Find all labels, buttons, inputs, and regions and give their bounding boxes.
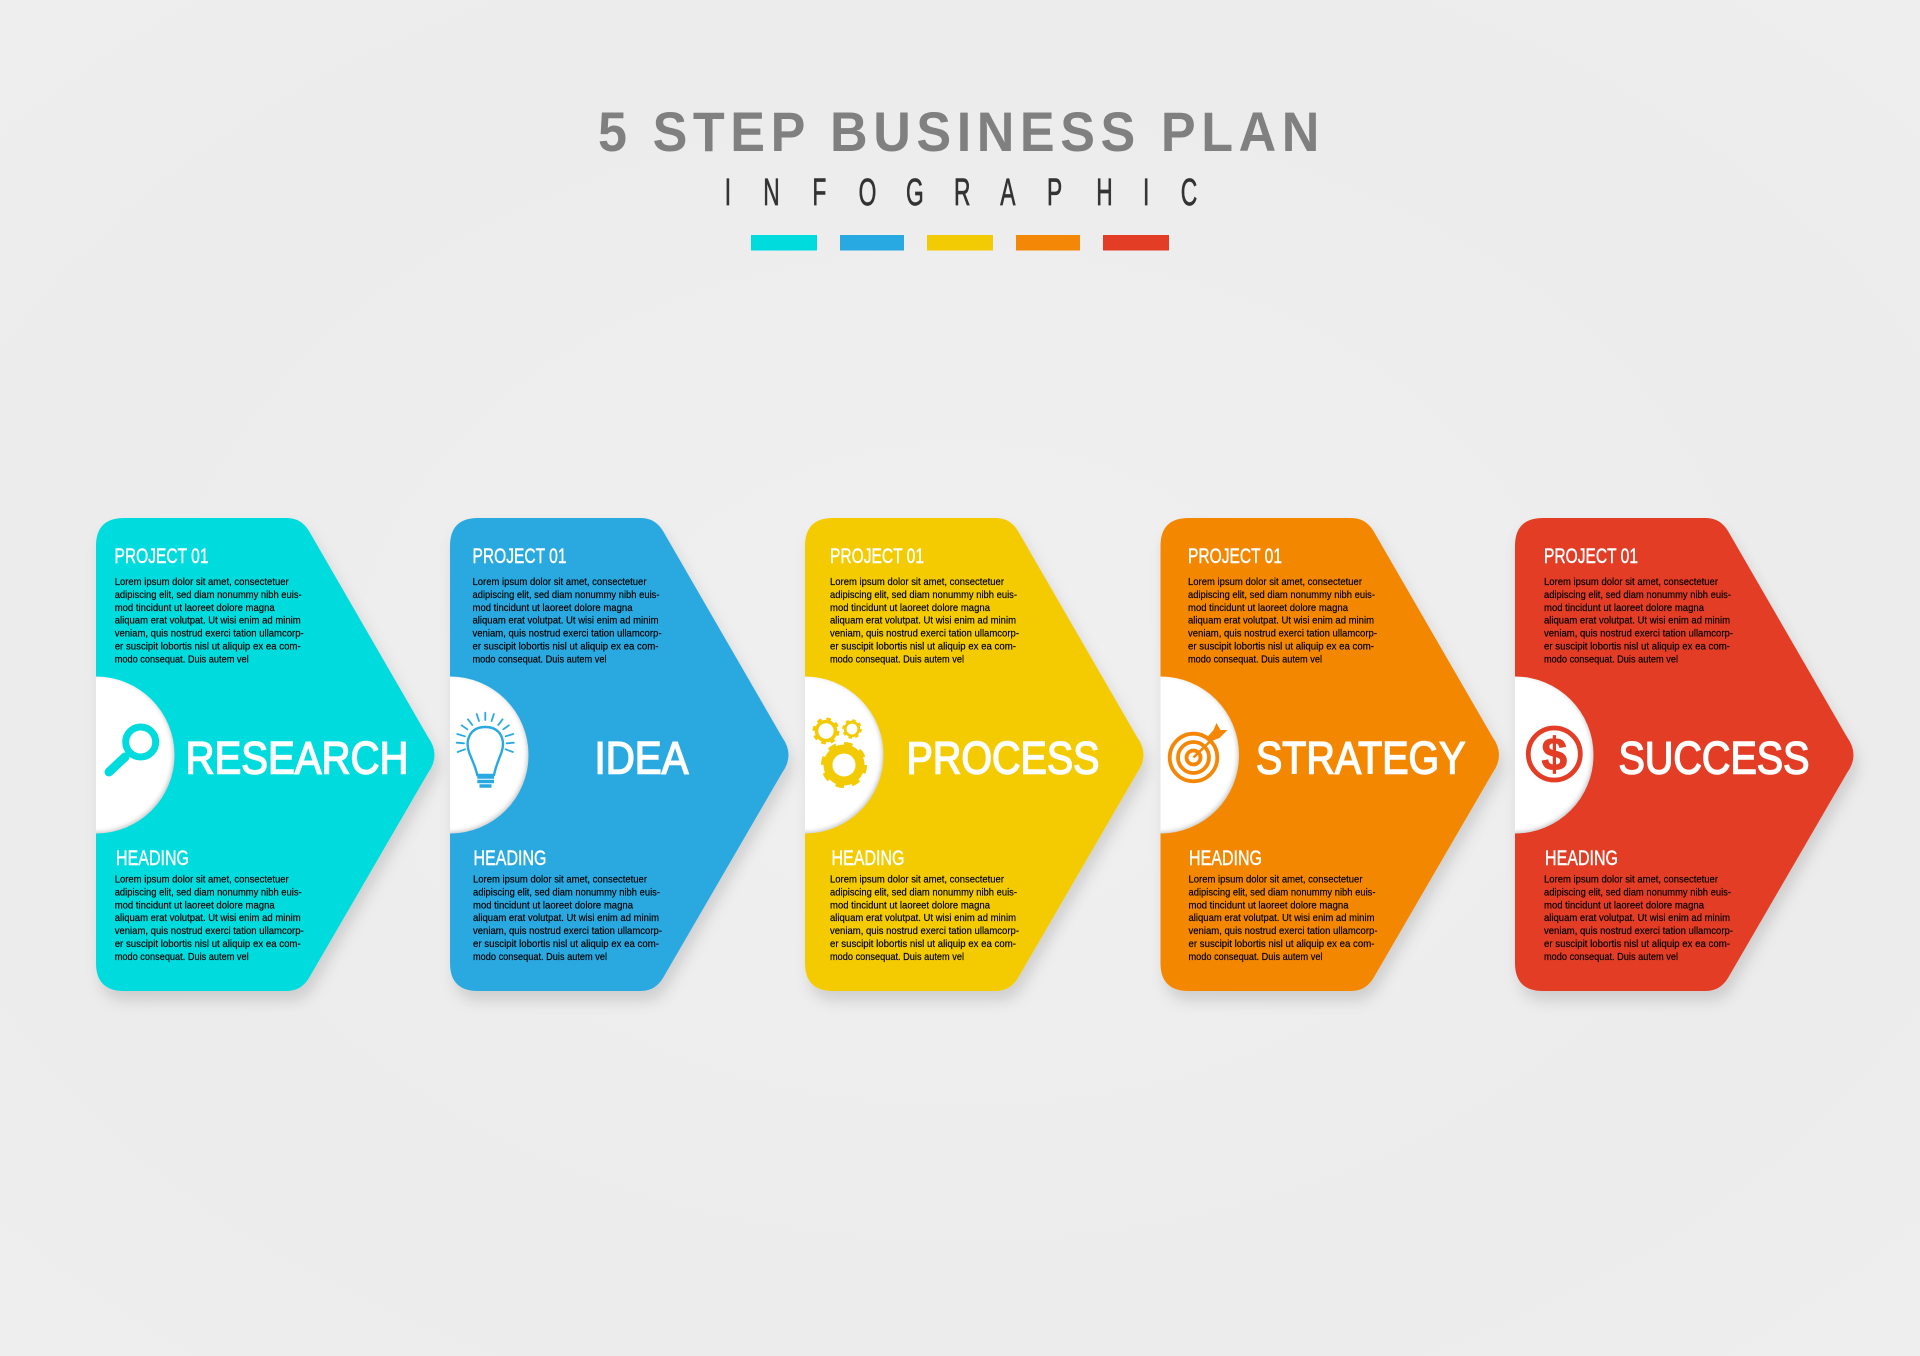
top text block: modo consequat. Duis autem vel [1544, 653, 1678, 665]
top text block: modo consequat. Duis autem vel [1188, 653, 1322, 665]
bottom text block: HEADING [1545, 847, 1618, 870]
icon: gears [814, 719, 864, 786]
icon: target with arrow [1170, 723, 1228, 781]
top text block: modo consequat. Duis autem vel [115, 653, 249, 665]
top text block [1188, 545, 1377, 665]
top text block [830, 545, 1019, 665]
icon: dollar coin [1528, 728, 1580, 780]
bottom text block: Lorem ipsum dolor sit amet, consectetuer [1544, 874, 1718, 886]
top text block: adipiscing elit, sed diam nonummy nibh euis- [115, 589, 302, 601]
bottom text block: mod tincidunt ut laoreet dolore magna [1544, 899, 1704, 911]
bottom text block [115, 847, 304, 963]
bottom text block: veniam, quis nostrud exerci tation ullamcorp- [830, 925, 1019, 937]
subtitle: INFOGRAPHIC [725, 171, 1197, 213]
bottom text block: HEADING [474, 847, 546, 870]
top text block: PROJECT 01 [1544, 545, 1638, 568]
bottom text block: mod tincidunt ut laoreet dolore magna [1188, 899, 1349, 911]
bottom text block: aliquam erat volutpat. Ut wisi enim ad minim [1544, 912, 1730, 924]
top text block: veniam, quis nostrud exerci tation ullamcorp- [472, 628, 662, 640]
bottom text block: Lorem ipsum dolor sit amet, consectetuer [830, 874, 1004, 886]
bottom text block: modo consequat. Duis autem vel [473, 951, 607, 963]
top text block: adipiscing elit, sed diam nonummy nibh euis- [1188, 589, 1375, 601]
top text block: Lorem ipsum dolor sit amet, consectetuer [830, 576, 1004, 588]
bottom text block: Lorem ipsum dolor sit amet, consectetuer [115, 874, 289, 886]
top text block: er suscipit lobortis nisl ut aliquip ex ea com- [115, 640, 301, 652]
top text block: Lorem ipsum dolor sit amet, consectetuer [115, 576, 289, 588]
top text block: veniam, quis nostrud exerci tation ullamcorp- [1188, 628, 1377, 640]
bottom text block: modo consequat. Duis autem vel [1188, 951, 1322, 963]
bottom text block: mod tincidunt ut laoreet dolore magna [473, 899, 633, 911]
arrow card shape [805, 518, 1144, 991]
panel: strategy [1158, 518, 1499, 991]
bottom text block: veniam, quis nostrud exerci tation ullamcorp- [473, 925, 662, 937]
bottom text block: mod tincidunt ut laoreet dolore magna [115, 899, 275, 911]
title: 5 STEP BUSINESS PLAN [598, 100, 1325, 163]
label: process: PROCESS [906, 732, 1100, 784]
bottom text block: Lorem ipsum dolor sit amet, consectetuer [473, 874, 647, 886]
bottom text block: adipiscing elit, sed diam nonummy nibh euis- [830, 886, 1017, 898]
panel: success [1512, 518, 1854, 991]
label: success: SUCCESS [1618, 732, 1810, 784]
bottom text block [1544, 847, 1733, 963]
top text block: er suscipit lobortis nisl ut aliquip ex ea com- [472, 640, 659, 652]
bottom text block: er suscipit lobortis nisl ut aliquip ex ea com- [115, 938, 301, 950]
bottom text block: aliquam erat volutpat. Ut wisi enim ad minim [1188, 912, 1375, 924]
bottom text block: HEADING [116, 847, 189, 870]
arrow card shape [450, 518, 788, 991]
bottom text block: adipiscing elit, sed diam nonummy nibh euis- [115, 886, 302, 898]
bottom text block: mod tincidunt ut laoreet dolore magna [830, 899, 990, 911]
panel: idea [447, 518, 788, 991]
top text block: PROJECT 01 [1188, 545, 1282, 568]
top text block: er suscipit lobortis nisl ut aliquip ex ea com- [1188, 640, 1374, 652]
arrow card shape [1515, 518, 1854, 991]
bottom text block: adipiscing elit, sed diam nonummy nibh euis- [473, 886, 660, 898]
top text block: Lorem ipsum dolor sit amet, consectetuer [1544, 576, 1718, 588]
top text block [1544, 545, 1733, 665]
top text block: PROJECT 01 [472, 545, 566, 568]
bottom text block: er suscipit lobortis nisl ut aliquip ex ea com- [1188, 938, 1375, 950]
top text block: adipiscing elit, sed diam nonummy nibh euis- [1544, 589, 1731, 601]
bottom text block: aliquam erat volutpat. Ut wisi enim ad minim [830, 912, 1016, 924]
top text block: veniam, quis nostrud exerci tation ullamcorp- [1544, 628, 1733, 640]
bottom text block: adipiscing elit, sed diam nonummy nibh euis- [1544, 886, 1731, 898]
bottom text block: aliquam erat volutpat. Ut wisi enim ad minim [473, 912, 659, 924]
top text block: aliquam erat volutpat. Ut wisi enim ad minim [115, 615, 301, 627]
white half circle [1512, 676, 1594, 834]
bottom text block: veniam, quis nostrud exerci tation ullamcorp- [1188, 925, 1378, 937]
arrow card shape [1160, 518, 1499, 991]
white half circle [802, 676, 884, 834]
bottom text block: modo consequat. Duis autem vel [830, 951, 964, 963]
white half circle [93, 676, 174, 834]
top text block: er suscipit lobortis nisl ut aliquip ex ea com- [1544, 640, 1730, 652]
top text block: PROJECT 01 [830, 545, 924, 568]
bottom text block: Lorem ipsum dolor sit amet, consectetuer [1188, 874, 1363, 886]
bottom text block: adipiscing elit, sed diam nonummy nibh euis- [1188, 886, 1376, 898]
bottom text block: er suscipit lobortis nisl ut aliquip ex ea com- [473, 938, 659, 950]
label: research: RESEARCH [186, 732, 408, 784]
top text block: er suscipit lobortis nisl ut aliquip ex ea com- [830, 640, 1016, 652]
label: idea: IDEA [594, 732, 688, 784]
top text block [472, 545, 662, 665]
bottom text block [473, 847, 662, 963]
top text block: mod tincidunt ut laoreet dolore magna [1188, 602, 1348, 614]
bottom text block: veniam, quis nostrud exerci tation ullamcorp- [1544, 925, 1733, 937]
top text block: modo consequat. Duis autem vel [472, 653, 606, 665]
top text block: veniam, quis nostrud exerci tation ullamcorp- [115, 628, 304, 640]
label: strategy: STRATEGY [1256, 732, 1466, 784]
panel: process [802, 518, 1144, 991]
white half circle [447, 676, 528, 834]
bottom text block: HEADING [1189, 847, 1262, 870]
white half circle [1158, 676, 1239, 834]
icon: magnifying glass [109, 727, 156, 772]
bottom text block: er suscipit lobortis nisl ut aliquip ex ea com- [1544, 938, 1730, 950]
bottom text block: er suscipit lobortis nisl ut aliquip ex ea com- [830, 938, 1016, 950]
top text block: mod tincidunt ut laoreet dolore magna [830, 602, 990, 614]
bottom text block [1188, 847, 1378, 963]
top text block: adipiscing elit, sed diam nonummy nibh euis- [472, 589, 660, 601]
colour legend bars [751, 235, 1169, 250]
icon: light bulb [457, 713, 514, 786]
panel: research [93, 518, 434, 991]
bottom text block: veniam, quis nostrud exerci tation ullamcorp- [115, 925, 304, 937]
icon: dollar coin: $ [1542, 728, 1567, 780]
arrow card shape [96, 518, 434, 991]
top text block: mod tincidunt ut laoreet dolore magna [1544, 602, 1704, 614]
bottom text block: modo consequat. Duis autem vel [115, 951, 249, 963]
top text block: Lorem ipsum dolor sit amet, consectetuer [472, 576, 647, 588]
top text block: mod tincidunt ut laoreet dolore magna [115, 602, 275, 614]
bottom text block: aliquam erat volutpat. Ut wisi enim ad minim [115, 912, 301, 924]
bottom text block: HEADING [832, 847, 904, 870]
top text block: veniam, quis nostrud exerci tation ullamcorp- [830, 628, 1019, 640]
top text block: aliquam erat volutpat. Ut wisi enim ad minim [472, 615, 659, 627]
top text block: aliquam erat volutpat. Ut wisi enim ad minim [1544, 615, 1730, 627]
bottom text block [830, 847, 1019, 963]
top text block: Lorem ipsum dolor sit amet, consectetuer [1188, 576, 1362, 588]
top text block: modo consequat. Duis autem vel [830, 653, 964, 665]
top text block [114, 545, 304, 665]
top text block: mod tincidunt ut laoreet dolore magna [472, 602, 633, 614]
top text block: aliquam erat volutpat. Ut wisi enim ad minim [830, 615, 1016, 627]
top text block: adipiscing elit, sed diam nonummy nibh euis- [830, 589, 1017, 601]
top text block: aliquam erat volutpat. Ut wisi enim ad minim [1188, 615, 1374, 627]
bottom text block: modo consequat. Duis autem vel [1544, 951, 1678, 963]
top text block: PROJECT 01 [114, 545, 208, 568]
